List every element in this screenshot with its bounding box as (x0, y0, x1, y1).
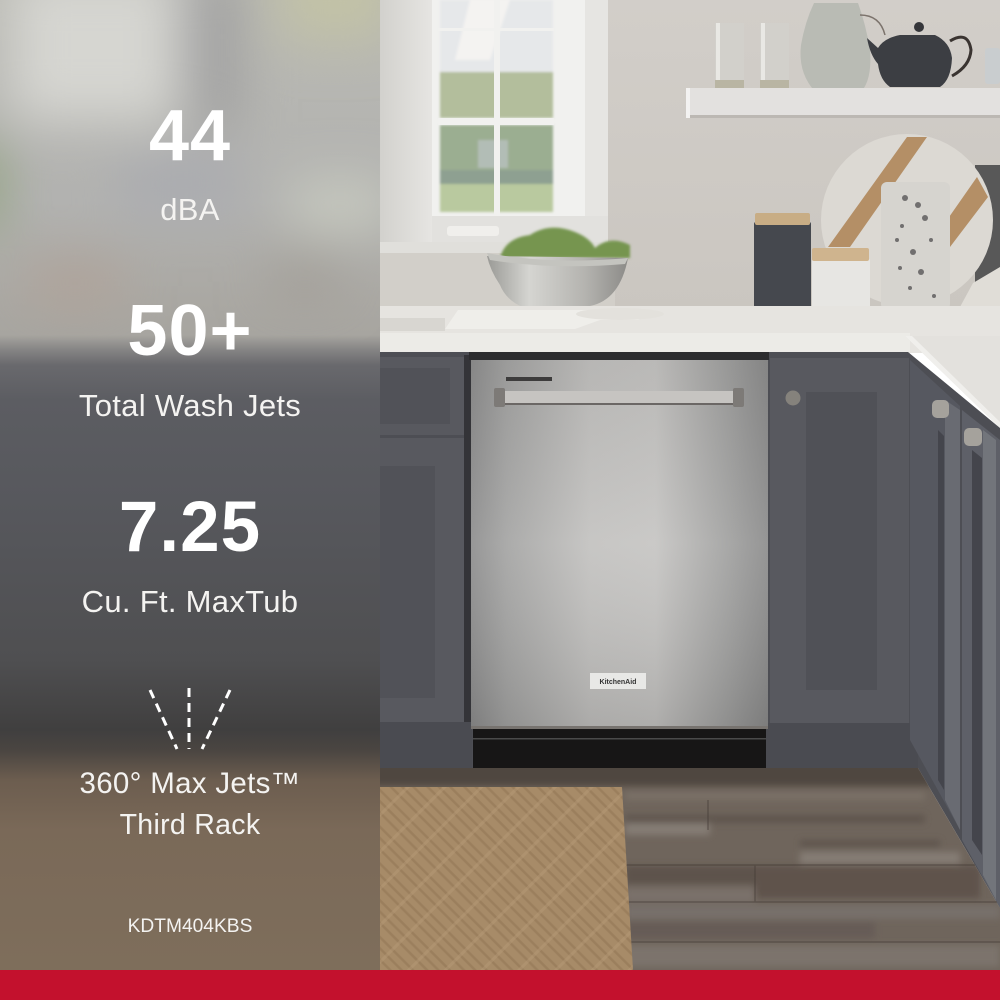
brand badge: KitchenAid (600, 679, 636, 686)
label cu ft maxtub: Cu. Ft. MaxTub (82, 584, 298, 619)
model number: KDTM404KBS (128, 916, 252, 937)
view through window (440, 0, 553, 212)
icon: spray jets (150, 688, 230, 749)
bowl of greens (487, 228, 630, 313)
countertop (380, 306, 1000, 428)
label: third rack (80, 767, 300, 841)
number 50+: 50+ (127, 291, 253, 371)
red footer bar (0, 970, 1000, 1000)
stat: 44 dBA (149, 96, 231, 227)
stat: 50+ total wash jets (79, 291, 301, 423)
side panel background (0, 0, 390, 1000)
handle (494, 388, 744, 407)
cutting boards and canisters (754, 134, 1000, 316)
floor (370, 760, 1000, 970)
number 7.25: 7.25 (119, 488, 261, 567)
label: third rack: Third Rack (120, 809, 260, 841)
brand badge (590, 673, 646, 689)
label total wash jets: Total Wash Jets (79, 388, 301, 423)
shelf items (715, 3, 1000, 88)
wall (380, 0, 1000, 320)
dishwasher (469, 352, 769, 768)
label: third rack: 360° Max Jets™ (80, 767, 300, 800)
stat: 7.25 cu ft (82, 488, 298, 619)
rug (380, 787, 633, 970)
label dBA: dBA (160, 192, 220, 227)
shelf (686, 88, 1000, 118)
cabinets (380, 352, 1000, 908)
number 44: 44 (149, 96, 231, 176)
window (380, 0, 615, 306)
